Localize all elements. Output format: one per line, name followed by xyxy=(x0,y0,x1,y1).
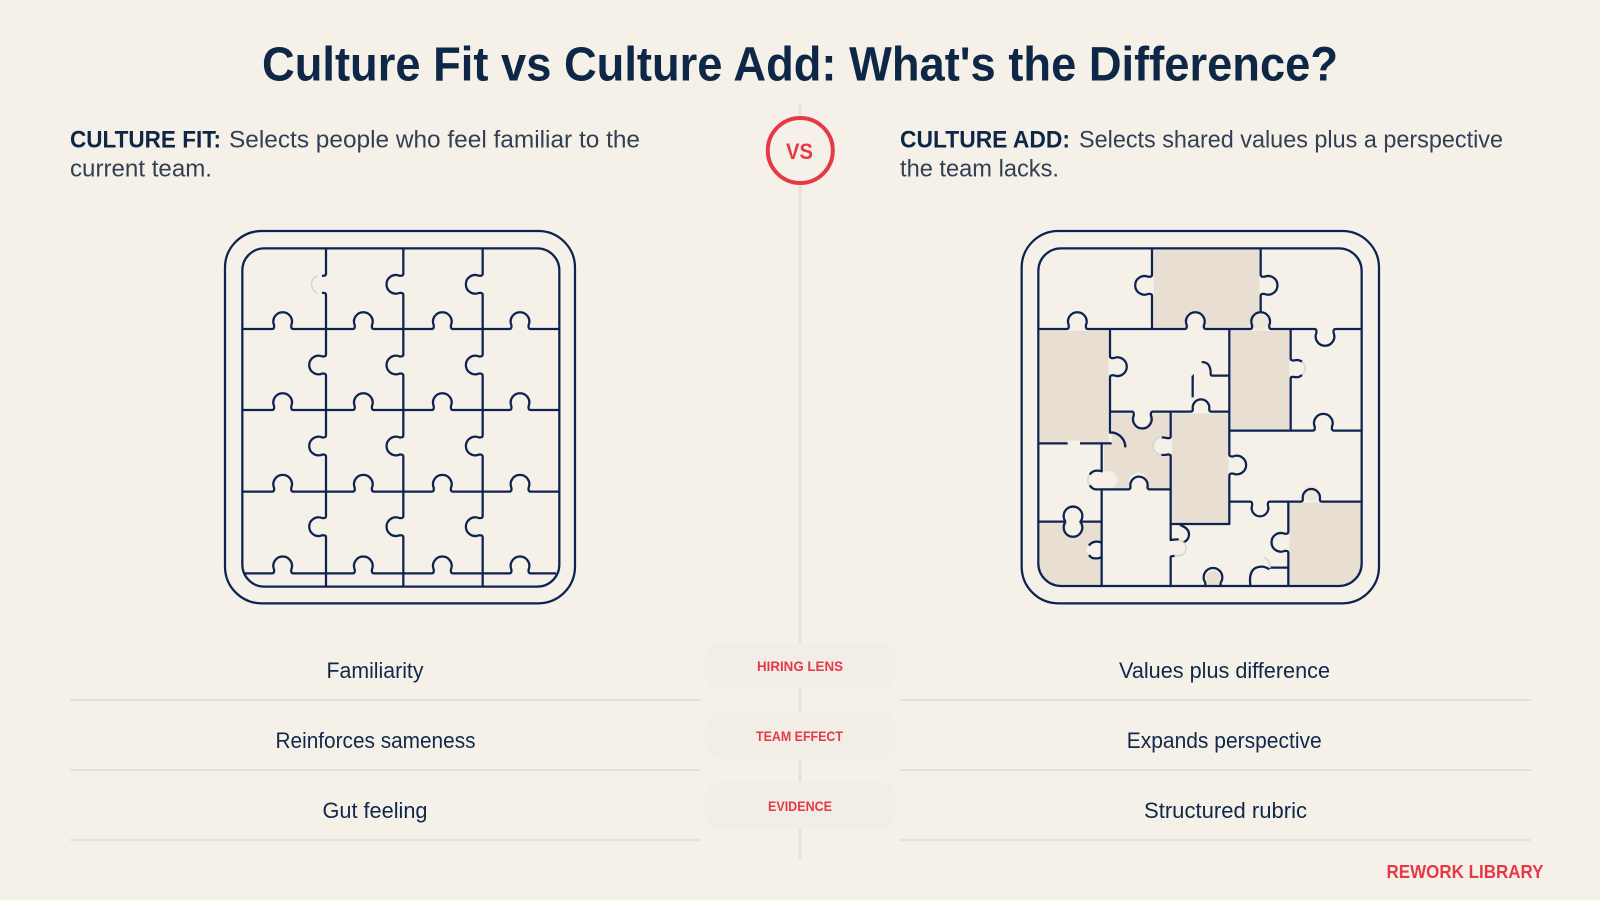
text block: culture fit definition: current team. xyxy=(70,156,212,182)
text block: culture add definition: CULTURE ADD: xyxy=(900,126,1070,154)
footer brand: REWORK LIBRARY xyxy=(1386,862,1544,882)
comparison row: team effect xyxy=(70,712,1531,771)
text block: culture add definition xyxy=(900,126,1503,182)
comparison row: hiring lens: HIRING LENS xyxy=(757,658,843,674)
text block: culture add definition: Selects shared values plus a perspective xyxy=(1079,126,1503,154)
comparison row: team effect: Reinforces sameness xyxy=(276,728,476,753)
comparison row: hiring lens: Values plus difference xyxy=(1119,658,1330,683)
center divider xyxy=(798,104,802,859)
text block: culture add definition: the team lacks. xyxy=(900,156,1059,182)
text block: culture fit definition: Selects people who feel familiar to the xyxy=(229,126,640,154)
comparison row: team effect: TEAM EFFECT xyxy=(756,728,843,744)
text block: culture fit definition: CULTURE FIT: xyxy=(70,126,221,154)
text block: culture fit definition xyxy=(70,126,640,182)
VS badge xyxy=(768,118,833,183)
title: Culture Fit vs Culture Add: What's the Difference? xyxy=(262,38,1338,92)
icon: mixed puzzle with varied pieces xyxy=(1022,231,1379,603)
comparison row: hiring lens xyxy=(70,642,1531,701)
comparison row: evidence: Gut feeling xyxy=(322,798,428,823)
icon: uniform puzzle grid xyxy=(225,231,575,603)
comparison row: hiring lens: Familiarity xyxy=(326,658,424,683)
VS badge: VS xyxy=(786,139,813,164)
comparison row: evidence: EVIDENCE xyxy=(768,798,832,814)
comparison row: evidence xyxy=(70,782,1531,841)
piece fills: highlighted tiles xyxy=(1040,250,1361,586)
comparison row: team effect: Expands perspective xyxy=(1127,728,1322,753)
comparison row: evidence: Structured rubric xyxy=(1144,798,1307,823)
